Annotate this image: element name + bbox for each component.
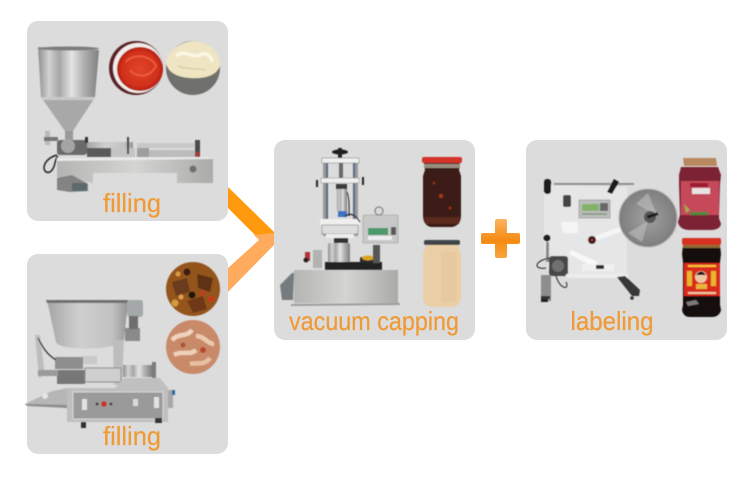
label: labeling: labeling (570, 306, 654, 336)
icon: round bottle labeling machine (537, 179, 677, 302)
arrow: merging chevron (228, 187, 274, 292)
icon: jar of cream sauce (423, 240, 461, 307)
icon: tomato sauce bowl (109, 41, 163, 95)
label: filling: filling (103, 188, 161, 218)
panel: filling, chunky foods (25, 254, 228, 454)
icon: plus sign (481, 219, 520, 258)
icon: shredded meat circle (166, 320, 220, 374)
panel: filling, sauces (27, 21, 228, 221)
icon: paste filling machine with mixing bowl (25, 300, 175, 428)
panel: labeling (526, 140, 727, 340)
icon: jar of raspberry jam (678, 158, 721, 230)
icon: piston filling machine with hopper (38, 46, 213, 192)
icon: jar of black bean chili sauce (682, 238, 721, 317)
icon: mayonnaise bowl (166, 41, 220, 95)
icon: vacuum capping machine (280, 148, 400, 306)
panel: vacuum capping (274, 140, 475, 340)
icon: jar of chili sauce (422, 157, 462, 227)
label: vacuum capping: vacuum capping (289, 306, 459, 336)
icon: braised beef circle (166, 262, 220, 316)
label: filling: filling (103, 421, 161, 451)
